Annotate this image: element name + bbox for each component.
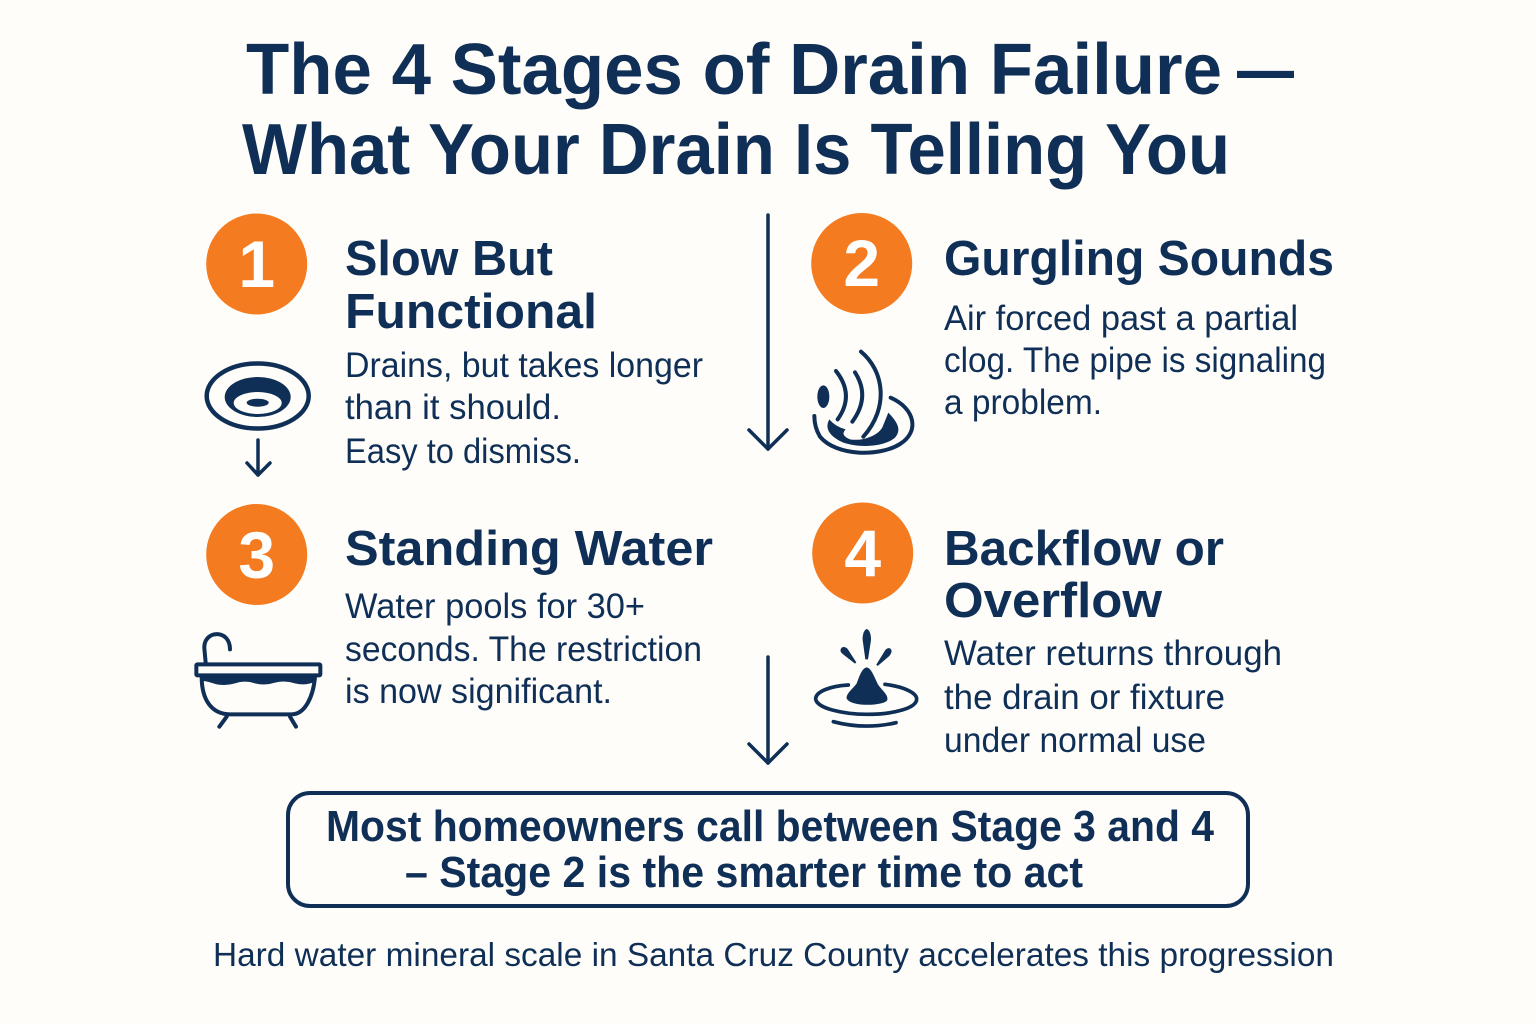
icon: bathtub with standing water [196,634,320,727]
callout [288,793,1248,906]
heading: backflow or overflow [944,522,1224,628]
text: stage 4 description [944,634,1282,760]
badge: number 3: 3 [238,518,275,592]
callout: Most homeowners call between Stage 3 and 4 [326,802,1214,851]
badge: number 4 [812,502,913,604]
footer note: Hard water mineral scale in Santa Cruz County accelerates this progression [213,936,1334,973]
badge: number 1: 1 [238,227,275,301]
badge: number 1 [206,214,307,314]
text: stage 2 description: a problem. [944,383,1102,422]
title [242,30,1294,190]
text: stage 2 description [944,299,1326,422]
arrow: long divider arrow bottom [749,657,787,763]
title: The 4 Stages of Drain Failure [246,30,1222,110]
panel: stage 2 [811,213,1334,453]
badge: number 2: 2 [843,226,880,300]
heading: gurgling sounds: Gurgling Sounds [944,232,1334,286]
panel: stage 1 [206,214,703,475]
callout: – Stage 2 is the smarter time to act [405,848,1083,897]
text: stage 1 description: Drains, but takes longer [345,346,703,385]
text: stage 3 description [345,587,702,711]
heading: slow but functional: Slow But [345,232,553,286]
title: What Your Drain Is Telling You [242,110,1230,190]
text: stage 1 description: Easy to dismiss. [345,432,581,471]
text: stage 4 description: the drain or fixture [944,678,1225,717]
heading: backflow or overflow: Backflow or [944,522,1224,576]
title: — [1237,30,1294,110]
text: stage 1 description: than it should. [345,388,561,427]
icon: gurgling water [814,352,912,453]
badge: number 4: 4 [844,516,881,590]
icon: slow drain [207,364,309,428]
text: stage 2 description: clog. The pipe is signaling [944,341,1326,380]
arrow: stage 1 small down arrow [247,440,270,475]
panel: stage 3 [196,504,713,727]
icon: water backflow [816,629,917,726]
text: stage 4 description: under normal use [944,721,1206,760]
heading: slow but functional [345,232,597,339]
panel: stage 4 [812,502,1282,760]
arrow: long divider arrow top [749,215,787,449]
heading: standing water: Standing Water [345,522,713,576]
text: stage 3 description: is now significant. [345,672,612,711]
text: stage 2 description: Air forced past a partial [944,299,1298,338]
text: stage 3 description: seconds. The restriction [345,630,702,669]
heading: slow but functional: Functional [345,285,597,339]
text: stage 3 description: Water pools for 30+ [345,587,645,626]
text: stage 1 description [345,346,703,471]
heading: backflow or overflow: Overflow [944,574,1163,628]
badge: number 2 [811,213,912,314]
badge: number 3 [206,504,307,605]
text: stage 4 description: Water returns through [944,634,1282,673]
